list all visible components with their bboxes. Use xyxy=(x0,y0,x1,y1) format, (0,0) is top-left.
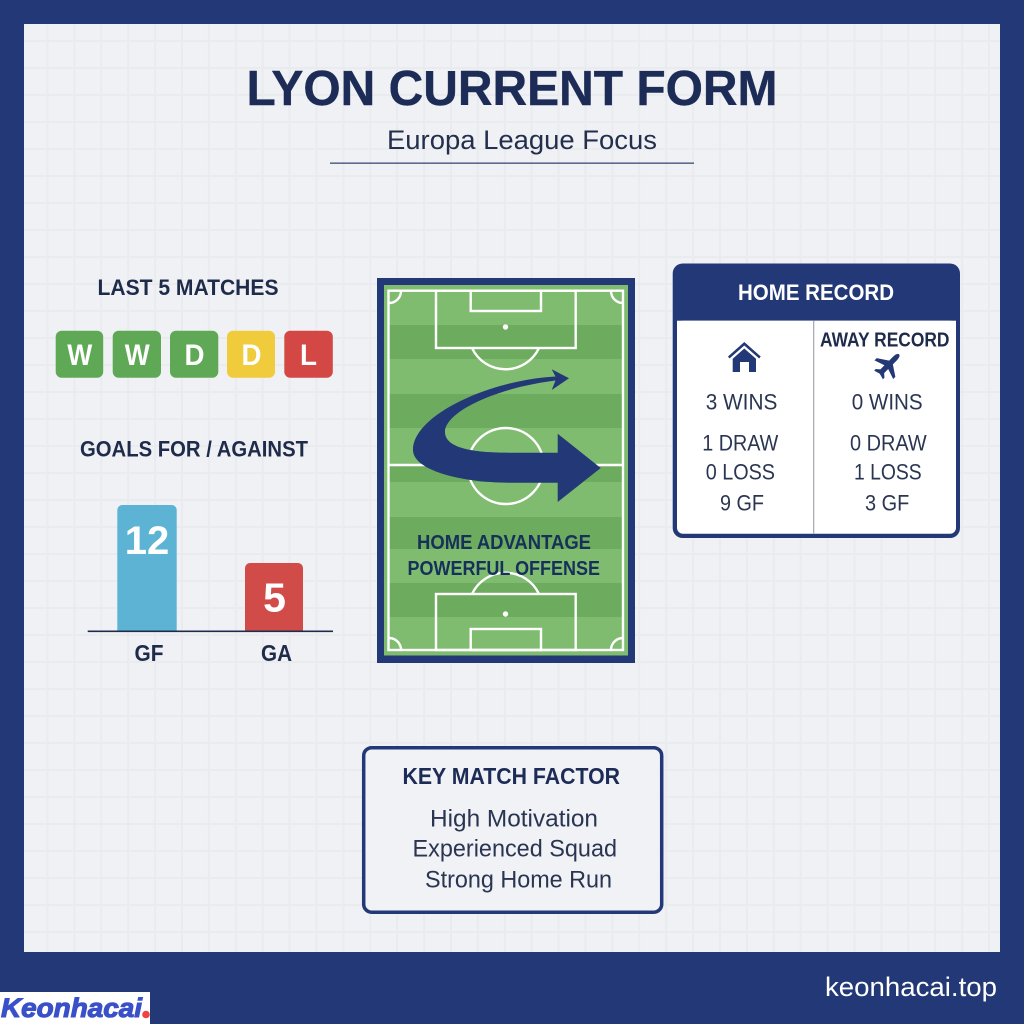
home stats xyxy=(702,390,779,516)
arrow: curved attack xyxy=(413,369,601,502)
column divider xyxy=(813,321,814,534)
away stats: 1 LOSS xyxy=(854,460,922,484)
footer website: keonhacai.top xyxy=(825,972,997,1002)
home stats: 1 DRAW xyxy=(702,430,779,456)
away stats: 0 DRAW xyxy=(850,430,927,456)
away stats xyxy=(850,390,927,516)
bar: goals for 12 xyxy=(117,505,177,631)
home stats: 9 GF xyxy=(720,490,764,516)
heading: home record: HOME RECORD xyxy=(738,280,894,305)
home stats: 0 LOSS xyxy=(706,460,775,484)
home stats: 3 WINS xyxy=(706,390,777,414)
pitch stripes xyxy=(389,325,623,617)
pitch caption: POWERFUL OFFENSE xyxy=(408,557,600,580)
form tile: win: W xyxy=(125,339,150,372)
label: GA: GA xyxy=(261,640,292,666)
bar: goals against 5: 5 xyxy=(263,575,286,621)
pitch caption: HOME ADVANTAGE xyxy=(417,531,591,554)
heading: away record: AWAY RECORD xyxy=(820,330,950,352)
factor list: High Motivation xyxy=(430,806,598,833)
bar: goals against 5 xyxy=(245,563,303,631)
footer logo: Keonhacai xyxy=(1,993,143,1023)
panel: key match factor xyxy=(364,748,662,912)
pitch markings xyxy=(388,291,623,650)
factor list xyxy=(412,806,617,894)
form tile: win xyxy=(56,331,103,378)
form tile: loss: L xyxy=(300,339,317,372)
form tile: win xyxy=(113,331,161,378)
pitch caption xyxy=(408,531,600,580)
title: LYON CURRENT FORM xyxy=(246,62,778,116)
heading: last 5 matches: LAST 5 MATCHES xyxy=(98,275,278,300)
panel: goals chart xyxy=(80,437,333,666)
icon: house xyxy=(728,342,761,372)
panel: home and away record xyxy=(673,264,960,538)
away stats: 3 GF xyxy=(865,490,909,516)
heading: goals for / against: GOALS FOR / AGAINST xyxy=(80,437,309,462)
form tile: draw yellow: D xyxy=(242,339,262,372)
heading: key match factor: KEY MATCH FACTOR xyxy=(402,763,620,789)
subtitle underline xyxy=(330,162,694,164)
form tile: draw green xyxy=(170,331,218,378)
bar: goals for 12: 12 xyxy=(125,519,169,563)
chart axis xyxy=(88,630,333,632)
form tile: draw yellow xyxy=(227,331,275,378)
factor list: Strong Home Run xyxy=(425,867,612,894)
label: GF: GF xyxy=(134,640,164,666)
panel: last 5 matches xyxy=(56,275,333,378)
subtitle: Europa League Focus xyxy=(387,125,657,155)
icon: airplane xyxy=(869,345,908,384)
form tile: loss xyxy=(284,331,333,378)
form tile: draw green: D xyxy=(184,339,204,372)
form tile: win: W xyxy=(67,339,93,372)
away stats: 0 WINS xyxy=(852,390,923,414)
panel: football pitch xyxy=(377,278,635,663)
factor list: Experienced Squad xyxy=(412,836,617,863)
